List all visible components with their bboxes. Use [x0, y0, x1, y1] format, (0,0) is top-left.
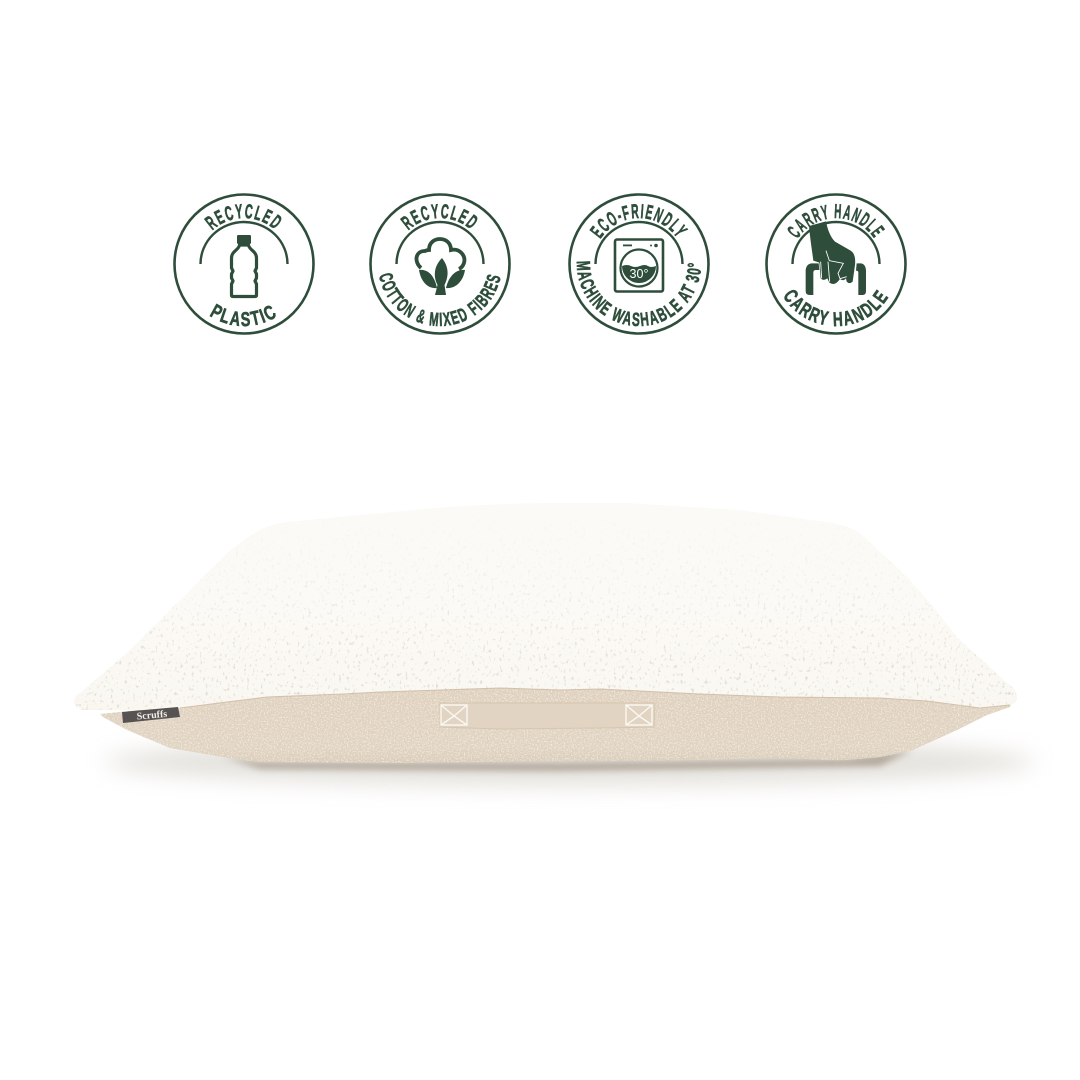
- left stitched patch: [441, 705, 467, 725]
- icon: cotton plant: [416, 239, 465, 295]
- label: plastic: PLASTIC: [210, 304, 276, 327]
- brand tag: [122, 707, 180, 723]
- inner arc: [596, 222, 682, 264]
- text: 30 degrees: 30°: [630, 267, 648, 281]
- label: carry handle: CARRY HANDLE: [784, 289, 889, 326]
- label: machine washable at 30 degrees: MACHINE WASHABLE AT 30°: [576, 261, 701, 326]
- seam line: [180, 688, 1010, 708]
- heading: carry handle: CARRY HANDLE: [788, 204, 886, 238]
- heading: recycled: RECYCLED: [400, 204, 478, 230]
- heading: eco-friendly: ECO-FRIENDLY: [589, 204, 688, 239]
- icon: hand gripping handle: [806, 221, 866, 295]
- badge: recycled cotton: [369, 193, 511, 335]
- badge: eco-friendly washing: [568, 193, 710, 335]
- inner arc: [396, 222, 484, 264]
- carry handle strap: [440, 703, 655, 729]
- icon: plastic bottle: [232, 235, 256, 296]
- heading: recycled: RECYCLED: [204, 204, 282, 230]
- badge ring: [370, 194, 510, 334]
- tag text: Scruffs: [136, 709, 168, 722]
- label: cotton and mixed fibres: COTTON & MIXED FIBRES: [379, 273, 500, 326]
- right stitched patch: [626, 705, 652, 725]
- inner arc: [200, 222, 288, 264]
- badge: carry handle: [765, 193, 907, 335]
- cushion: [70, 500, 1020, 770]
- badge ring: [174, 194, 314, 334]
- cushion ground shadow: [105, 738, 1035, 786]
- badge: recycled plastic: [173, 193, 315, 335]
- inner arc: [792, 222, 880, 264]
- cushion top: cream fleece: [70, 500, 1020, 710]
- cushion base: beige canvas: [100, 688, 1011, 763]
- badge ring: [766, 194, 906, 334]
- badge ring: [570, 194, 708, 334]
